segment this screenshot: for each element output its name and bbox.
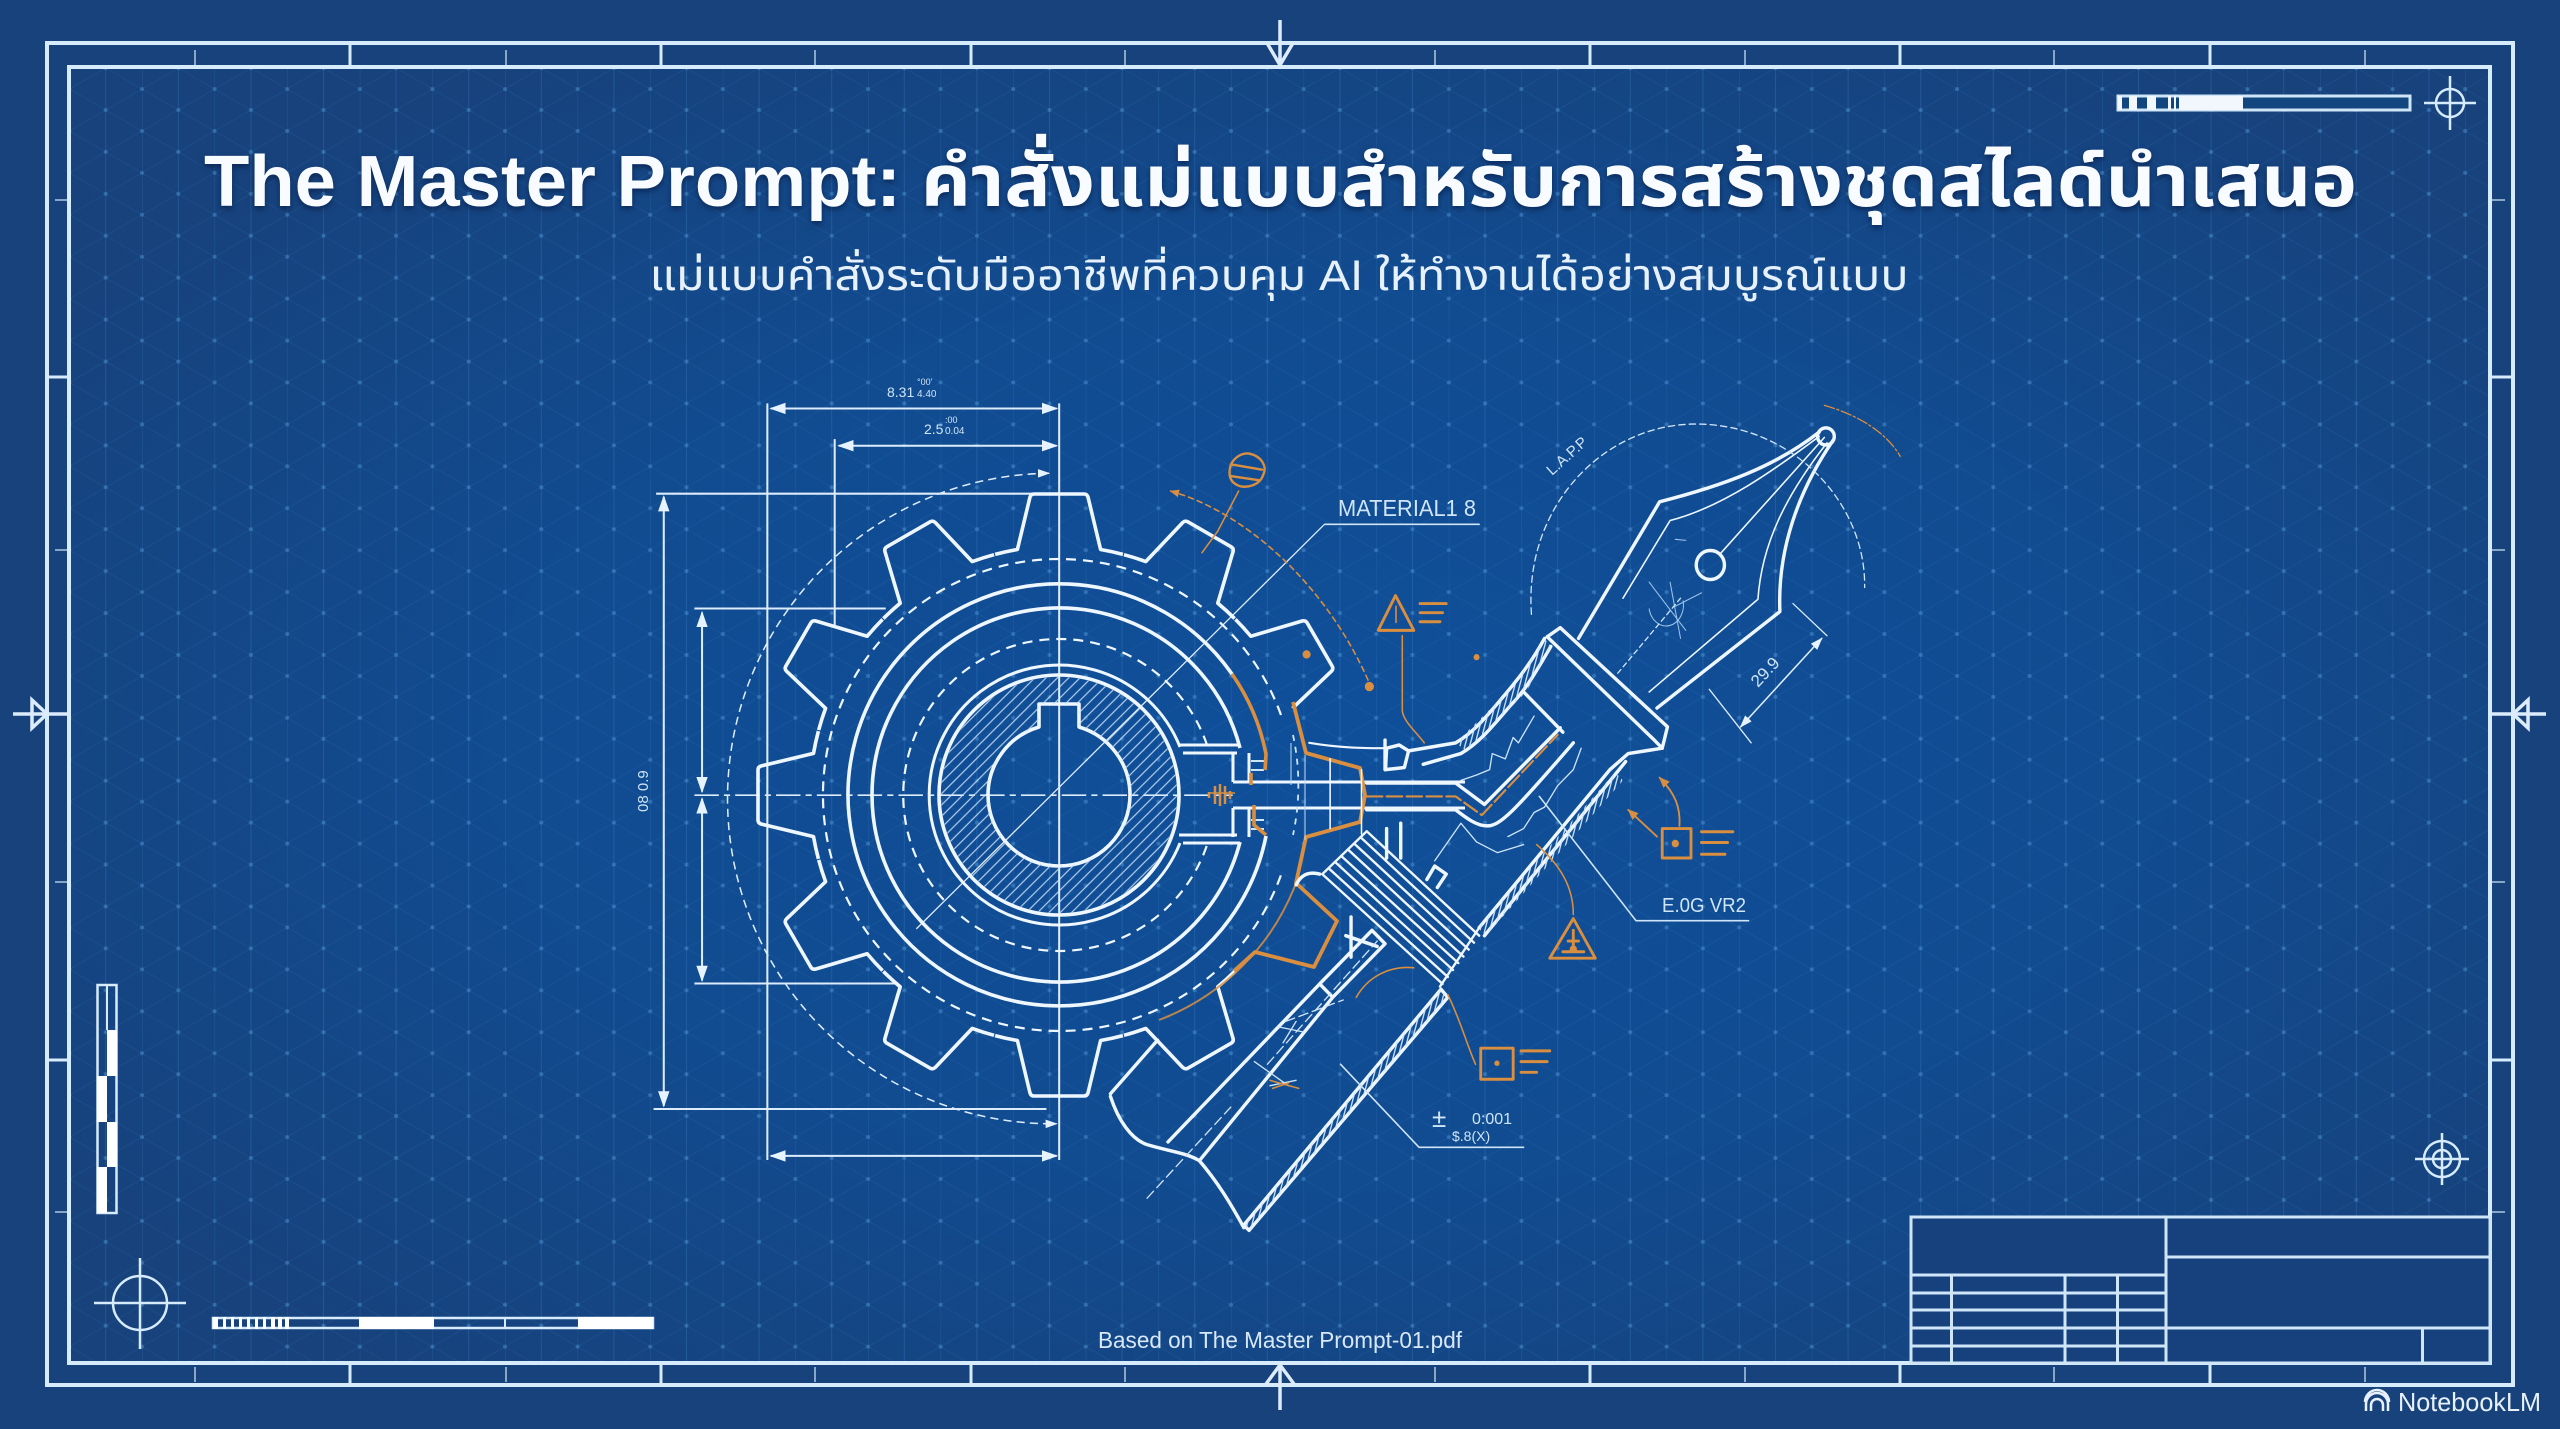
wordmark: NotebookLM bbox=[2398, 1387, 2541, 1417]
leader lines bbox=[1325, 524, 1749, 1147]
pen labels bbox=[1338, 434, 1783, 1144]
gear body bbox=[758, 494, 1465, 1096]
dimension labels bbox=[635, 377, 965, 812]
hatched hub bbox=[941, 677, 1177, 913]
barrel bbox=[1309, 638, 1662, 936]
fountain pen bbox=[1110, 405, 1900, 1230]
center arrow: right bbox=[2490, 700, 2546, 728]
dimension labels: 08 0.9 bbox=[635, 770, 652, 812]
dimension labels: °00' bbox=[917, 377, 933, 387]
orange arc on nib tip bbox=[1824, 405, 1900, 456]
pen labels: 0:001 bbox=[1472, 1111, 1512, 1128]
collar bbox=[1547, 628, 1667, 748]
dimension labels: 4.40 bbox=[917, 389, 937, 400]
vertical scale bar bbox=[97, 985, 117, 1213]
NotebookLM badge bbox=[2365, 1387, 2541, 1417]
source note: Based on The Master Prompt-01.pdf bbox=[1098, 1327, 1463, 1353]
dimension labels: 2.5 bbox=[924, 421, 944, 437]
pen labels: MATERIAL1 8 bbox=[1338, 495, 1476, 521]
crosshair: lower left bbox=[94, 1258, 186, 1349]
lower barrel bbox=[1110, 873, 1448, 1230]
orange callouts bbox=[1171, 453, 1733, 1079]
title bbox=[204, 134, 2357, 225]
nib bbox=[1579, 428, 1834, 708]
title block bbox=[1911, 1217, 2490, 1363]
target: lower right bbox=[2415, 1133, 2469, 1185]
title: คำสั่งแม่แบบสำหรับการสร้างชุดสไลด์นำเสนอ bbox=[921, 134, 2357, 225]
pen labels: $.8(X) bbox=[1452, 1128, 1490, 1144]
nib dimension bbox=[1709, 604, 1827, 743]
dimension labels: 0.04 bbox=[945, 426, 965, 437]
subtitle: แม่แบบคำสั่งระดับมืออาชีพที่ควบคุม AI ให้ทำงานได้อย่างสมบูรณ์แบบ bbox=[650, 246, 1908, 301]
dashed arc crossing the shaft bbox=[1293, 735, 1298, 835]
concentric rings bbox=[823, 559, 1281, 1031]
dimension labels: :00 bbox=[945, 415, 958, 425]
gear teeth bbox=[758, 494, 1340, 1096]
grip threads bbox=[1322, 831, 1479, 987]
center arrow: left bbox=[13, 700, 69, 728]
horizontal scale bar bbox=[213, 1317, 653, 1329]
pen labels: E.0G VR2 bbox=[1662, 895, 1746, 917]
icon: NotebookLM logo bbox=[2365, 1390, 2389, 1411]
pen labels: 29.9 bbox=[1747, 654, 1783, 691]
gear drawing with dimensions bbox=[635, 377, 1465, 1160]
nib dashed circle bbox=[1531, 424, 1865, 614]
scale bar: top right bbox=[2118, 96, 2410, 110]
orange gear section bbox=[1159, 674, 1365, 1020]
center arrow: top bbox=[1267, 20, 1293, 65]
pen labels: L.A.P.P bbox=[1543, 434, 1591, 479]
title: The Master Prompt: bbox=[204, 142, 901, 222]
center arrow: bottom bbox=[1266, 1365, 1294, 1410]
pen labels: ± bbox=[1432, 1103, 1446, 1133]
crosshair: top right bbox=[2424, 76, 2476, 130]
hub and shaft section bbox=[1179, 745, 1465, 843]
dimension labels: 8.31 bbox=[887, 384, 914, 400]
dimension lines bbox=[654, 403, 1416, 1160]
